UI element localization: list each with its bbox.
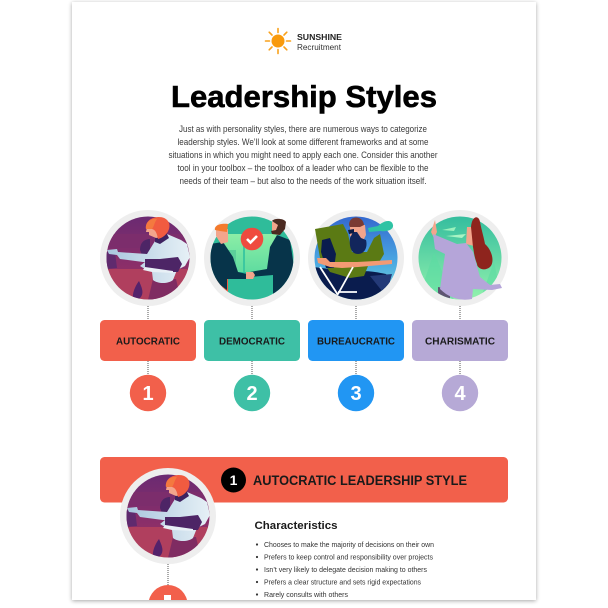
intro paragraph: leadership styles. We’ll look at some different frameworks and at some [178, 137, 428, 147]
page [72, 2, 536, 600]
label: charismatic: CHARISMATIC [425, 336, 495, 348]
illustration: autocratic [100, 210, 196, 306]
title: Leadership Styles [171, 79, 437, 114]
banner number: 1 [230, 472, 238, 488]
label: democratic [204, 320, 300, 361]
section illustration: autocratic [120, 468, 216, 564]
section number circle [149, 585, 187, 600]
number 1: 1 [142, 383, 154, 405]
intro paragraph: Just as with personality styles, there are numerous ways to categorize [179, 124, 427, 134]
illustration: bureaucratic [308, 210, 404, 306]
number 3: 3 [350, 383, 362, 405]
section connector [167, 560, 169, 586]
banner title: AUTOCRATIC LEADERSHIP STYLE [253, 473, 467, 488]
label: bureaucratic: BUREAUCRATIC [317, 336, 395, 348]
characteristics list: Prefers a clear structure and sets rigid expectations [264, 578, 421, 586]
characteristics list [256, 540, 434, 599]
characteristics heading: Characteristics [254, 520, 338, 532]
page shadow [72, 3, 536, 601]
intro paragraph: needs of their team – but also to the needs of the work situation itself. [180, 176, 426, 186]
illustration: charismatic [412, 210, 508, 306]
number 4: 4 [454, 383, 466, 405]
label: bureaucratic [308, 320, 404, 361]
intro paragraph: tool in your toolbox – the toolbox of a leader who can be flexible to the [178, 163, 428, 173]
label: autocratic: AUTOCRATIC [116, 336, 180, 348]
label: democratic: DEMOCRATIC [219, 336, 285, 348]
number 4 [442, 375, 478, 411]
characteristics list: Isn’t very likely to delegate decision making to others [264, 565, 427, 574]
characteristics list: Chooses to make the majority of decisions on their own [264, 540, 434, 549]
intro paragraph [168, 124, 438, 186]
label: autocratic [100, 320, 196, 361]
illustration: democratic [204, 210, 300, 306]
logo text: SUNSHINE [297, 32, 342, 42]
section banner [100, 457, 508, 502]
characteristics list: Prefers to keep control and responsibility over projects [264, 552, 433, 562]
number 2: 2 [246, 383, 258, 405]
logo text: Recruitment [297, 42, 342, 52]
label: charismatic [412, 320, 508, 361]
intro paragraph: situations in which you might need to apply each one. Consider this another [168, 150, 438, 160]
logo text [297, 32, 342, 52]
number 3 [338, 375, 374, 411]
characteristics list: Rarely consults with others [264, 590, 348, 599]
connector lines [148, 300, 460, 376]
logo [266, 28, 342, 54]
number 1 [130, 375, 166, 411]
number 2 [234, 375, 270, 411]
icon: sun [266, 28, 290, 54]
banner number [221, 468, 246, 492]
